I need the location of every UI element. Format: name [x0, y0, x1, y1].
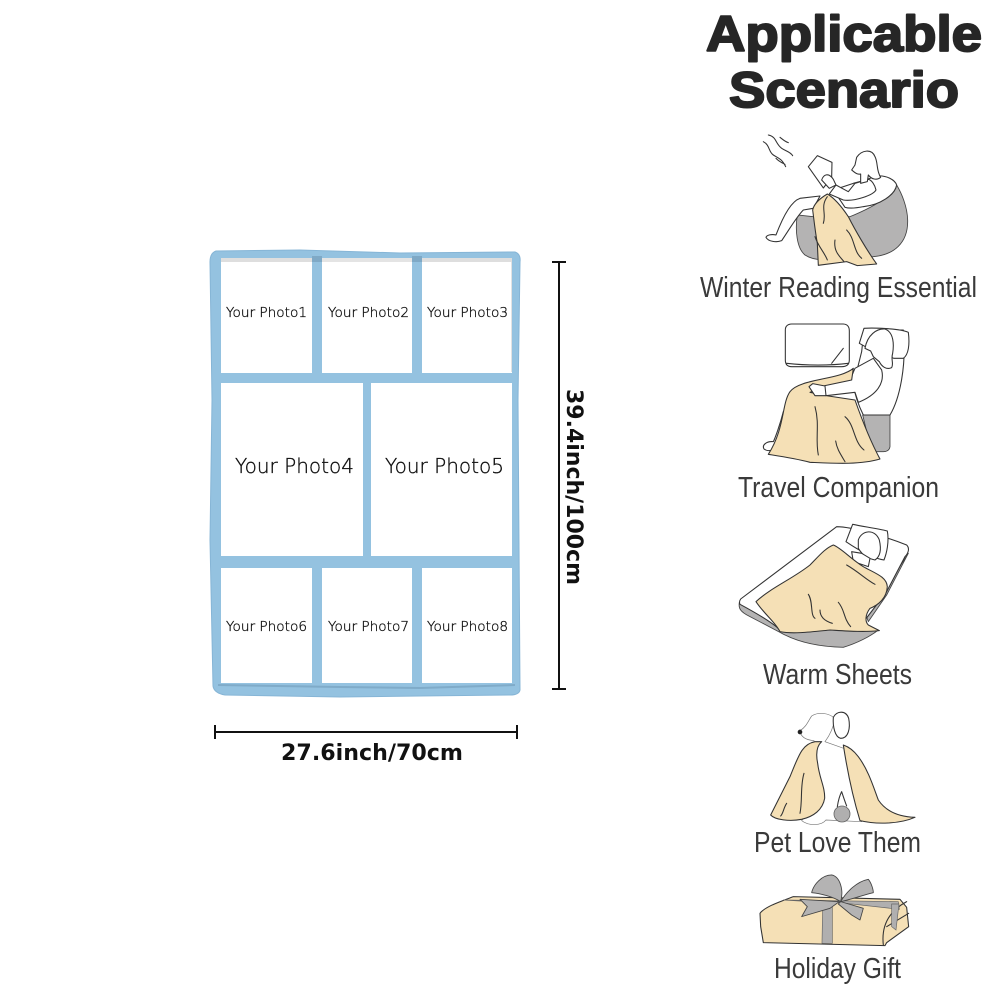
- caption: Warm Sheets: Warm Sheets: [763, 659, 912, 691]
- photo slot 6: Your Photo6: [226, 619, 307, 635]
- icon: bed with warm sheets: [739, 524, 908, 647]
- photo slot 2: [322, 258, 412, 373]
- title: Scenario: [729, 62, 959, 118]
- width dimension: [215, 725, 517, 766]
- height dimension: 39.4inch/100cm: [561, 389, 586, 585]
- caption: Holiday Gift: Holiday Gift: [774, 953, 901, 985]
- icon: reading in beanbag: [763, 135, 908, 266]
- photo slot 1: [221, 258, 312, 373]
- photo slot 7: Your Photo7: [328, 619, 409, 635]
- photo slot 2: Your Photo2: [328, 305, 409, 321]
- title: Applicable: [706, 6, 982, 62]
- bottom edge shading: [218, 685, 515, 688]
- photo slot 4: [221, 383, 363, 556]
- photo slot 4: Your Photo4: [235, 454, 354, 478]
- photo slot 7: [322, 568, 412, 683]
- width dimension: 27.6inch/70cm: [281, 741, 463, 766]
- caption: Travel Companion: Travel Companion: [738, 472, 939, 504]
- height dimension: [552, 262, 586, 689]
- panel: blanket photo layout: [210, 250, 520, 697]
- icon: gift box: [760, 875, 909, 946]
- photo slot 3: Your Photo3: [427, 305, 508, 321]
- photo slot 3: [422, 258, 512, 373]
- photo slot 6: [221, 568, 312, 683]
- caption: Pet Love Them: Pet Love Them: [754, 827, 921, 859]
- icon: dog with blanket: [771, 712, 915, 825]
- title: [706, 6, 982, 118]
- icon: airplane travel: [763, 324, 909, 463]
- photo slot 1: Your Photo1: [226, 305, 307, 321]
- photo slot 8: Your Photo8: [427, 619, 508, 635]
- top fold shadow: [221, 256, 512, 372]
- photo slot 8: [422, 568, 512, 683]
- photo slot 5: Your Photo5: [385, 454, 504, 478]
- blanket frame: [210, 250, 520, 697]
- photo slot 5: [371, 383, 512, 556]
